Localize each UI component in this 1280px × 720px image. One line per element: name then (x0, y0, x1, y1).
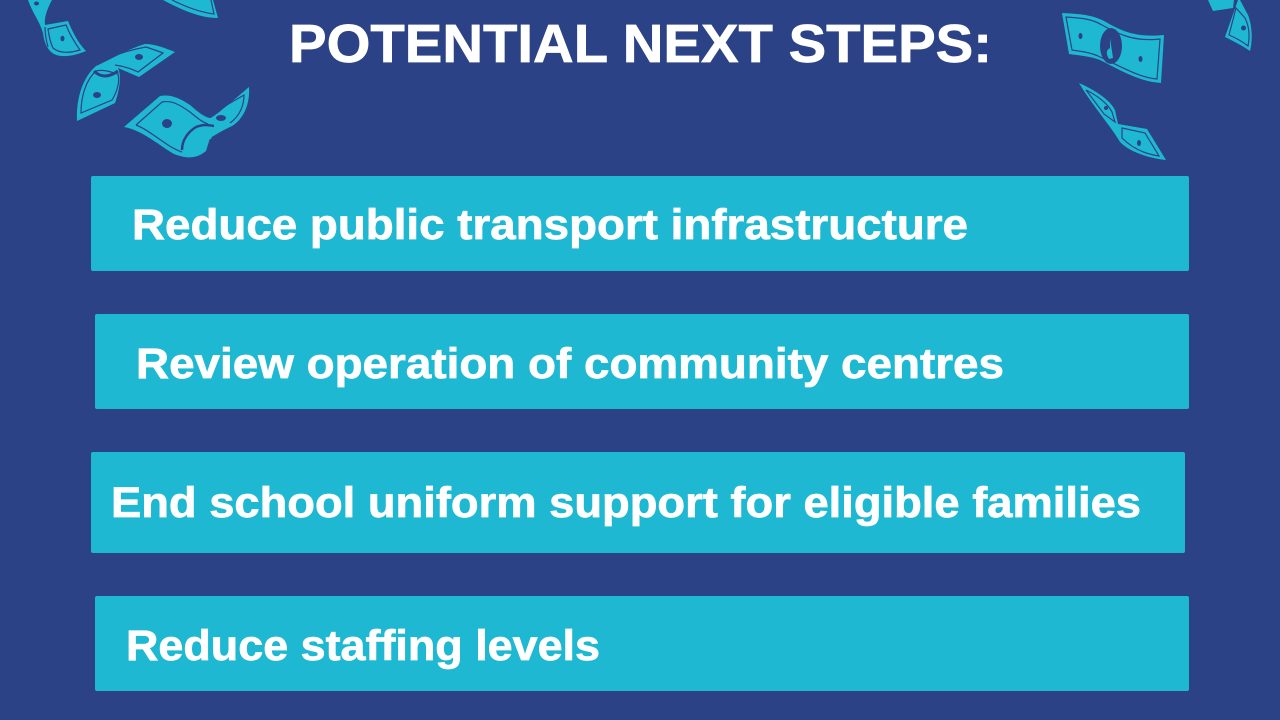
icon: thin twisted bill (1079, 83, 1166, 160)
icon: top right bill (1208, 0, 1252, 51)
text: step 2 label: Review operation of community centres (136, 340, 1004, 388)
text: step 4 label: Reduce staffing levels (126, 622, 600, 670)
panel: step 3 (91, 452, 1185, 553)
icon: large bill (1062, 13, 1164, 83)
icon: bill top left (28, 0, 86, 56)
panel: step 2 (95, 314, 1189, 409)
icon: bill lower left (124, 87, 249, 157)
title: POTENTIAL NEXT STEPS: (289, 14, 992, 74)
icon: falling money left (28, 0, 249, 157)
icon: bill top centre (163, 0, 218, 18)
panel: step 1 (91, 176, 1189, 271)
panel: step 4 (95, 596, 1189, 691)
icon: bill middle left (77, 44, 175, 121)
text: step 3 label: End school uniform support for eligible families (111, 479, 1141, 527)
icon: falling money right (1062, 0, 1252, 160)
text: step 1 label: Reduce public transport infrastructure (132, 201, 968, 249)
